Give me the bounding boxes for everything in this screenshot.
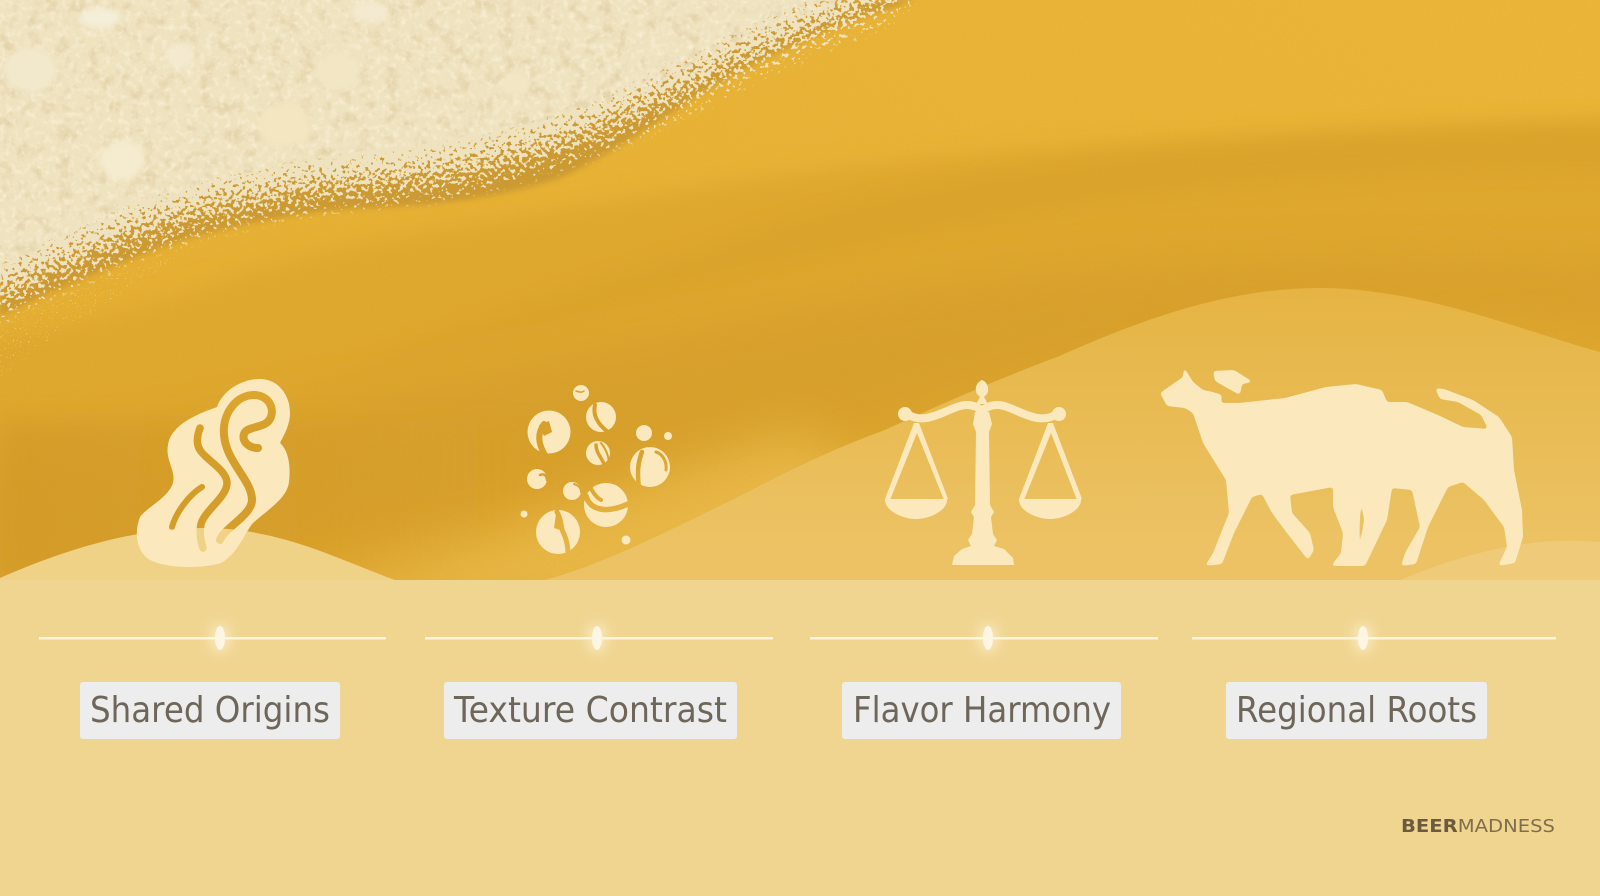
label: Flavor Harmony: Flavor Harmony <box>853 690 1111 731</box>
background hills <box>0 288 1600 580</box>
label: Regional Roots: Regional Roots <box>1236 690 1477 731</box>
label: Flavor Harmony <box>842 682 1121 739</box>
bottom panel <box>0 580 1600 896</box>
label: Shared Origins: Shared Origins <box>90 690 330 731</box>
logo: BeerMadness wordmark: BEER MADNESS <box>1401 816 1555 837</box>
icon: regional roots bull and bird <box>1160 367 1523 566</box>
column 4: divider and label <box>1192 623 1556 739</box>
label: Texture Contrast <box>444 682 737 739</box>
label: Texture Contrast: Texture Contrast <box>453 690 727 731</box>
icon: texture contrast bubbles <box>520 385 672 554</box>
label: Regional Roots <box>1226 682 1487 739</box>
column 1: divider and label <box>39 623 386 739</box>
icon: shared origins swirl <box>137 379 290 567</box>
icon: flavor harmony scales <box>885 380 1082 565</box>
column 2: divider and label <box>425 623 773 739</box>
column 3: divider and label <box>810 623 1158 739</box>
label: Shared Origins <box>80 682 340 739</box>
foam head <box>0 0 980 378</box>
